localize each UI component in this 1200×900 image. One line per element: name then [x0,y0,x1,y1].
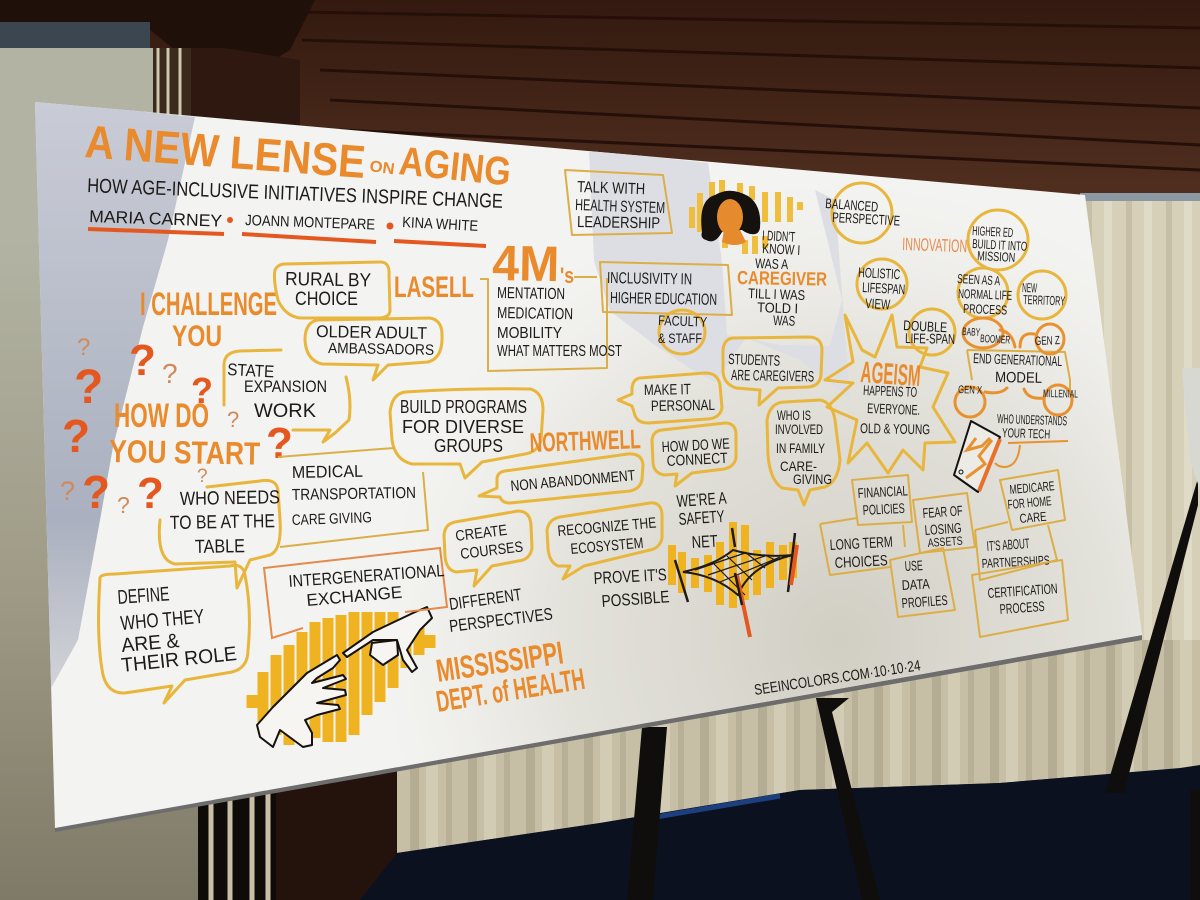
list: medical transportation care giving: MEDICAL [292,462,363,482]
bubble: who needs to be at the table: WHO NEEDS [180,487,280,510]
bubble: higher ed build it into mission: HIGHER ED [972,223,1014,240]
text: I didn't know I was a caregiver: WAS A [755,255,789,272]
box: it's about partnerships [975,522,1057,580]
list: medical transportation care giving [278,448,428,547]
text: I didn't know I was a caregiver [737,227,827,329]
title: on aging [368,139,513,195]
box: certification process: CERTIFICATION [987,580,1058,601]
bubble: double life-span [903,309,955,355]
bubble: build programs for diverse groups: GROUPS [434,436,503,456]
title: on aging: AGING [397,139,513,195]
box: certification process [972,560,1068,637]
box: financial policies [852,475,912,525]
box: financial policies: POLICIES [862,500,905,518]
bubble: higher ed build it into mission [968,210,1028,270]
bubble: students are caregivers [723,337,822,405]
box: it's about partnerships: PARTNERSHIPS [981,552,1050,571]
title block [83,115,513,246]
question marks: ? [162,358,178,389]
bubble: create courses: COURSES [459,538,524,563]
callout: ageism starburst: OLD & YOUNG [860,420,930,437]
bubble: non abandonment [479,454,643,503]
box: inclusivity in higher education [600,262,732,315]
text: we're a safety net: NET [691,532,718,552]
callout: ageism starburst: AGEISM [860,356,922,393]
section: I challenge you: I CHALLENGE [140,286,277,322]
section: how do you start [109,397,261,472]
diagram: end generational model: BOOMER [980,333,1010,347]
bubble: seen as a normal life process: PROCESS [963,301,1008,318]
text: who understands your tech: WHO UNDERSTANDS [997,411,1068,428]
right side board [1182,368,1200,490]
illustration: safety net [672,522,797,637]
bubble: who needs to be at the table: TO BE AT THE [170,511,275,534]
text: I didn't know I was a caregiver: WAS [773,312,795,329]
list: medical transportation care giving: CARE GIVING [292,509,372,529]
list: 4M's: MEDICATION [497,305,573,323]
bubble: rural by choice: CHOICE [295,289,358,310]
bubble: how do we connect: CONNECT [666,450,728,470]
bubble: seen as a normal life process: NORMAL LIFE [958,286,1013,303]
bubble: state expansion work: WORK [254,401,316,422]
bubble: define who they are and their role: THEIR ROLE [120,643,238,677]
section: how do you start: HOW DO [114,397,209,435]
easel legs [627,478,1200,900]
text: different perspectives: PERSPECTIVES [448,604,554,636]
box: long term choices [820,518,905,575]
bubble: higher ed build it into mission: MISSION [977,248,1016,265]
bubble: faculty & staff [658,310,708,354]
bubble: new territory [1018,271,1066,319]
bubble: who is involved in family care-giving: INVOLVED [775,421,823,437]
label: Northwell: NORTHWELL [529,424,641,458]
box: use data profiles: PROFILES [901,592,948,611]
question marks: ? [117,492,130,518]
box: financial policies: FINANCIAL [857,482,908,501]
question marks: ? [74,361,103,414]
bubble: older adult ambassadors [305,318,442,380]
text: I didn't know I was a caregiver: TOLD I [757,299,798,316]
box: talk with health system leadership: HEALTH SYSTEM [575,197,665,217]
bubble: who is involved in family care-giving [767,400,840,505]
presenters: MARIA CARNEY [89,207,222,231]
background: wood ceiling [0,0,1200,205]
diagram: end generational model: GEN X [958,384,983,397]
bubble: state expansion work: STATE [227,360,275,381]
diagram: end generational model: BABY [962,326,981,339]
question marks: ? [82,466,110,518]
bubble: make it personal [618,373,722,423]
bubble: faculty & staff: & STAFF [658,330,702,346]
label: innovation: INNOVATION [902,234,968,256]
bubble: older adult ambassadors: OLDER ADULT [316,322,427,343]
diagram: end generational model: END GENERATIONAL [973,350,1063,369]
bubble: who is involved in family care-giving: IN FAMILY [776,440,825,456]
bubble: rural by choice: RURAL BY [285,269,372,292]
bubble: make it personal: MAKE IT [644,381,691,399]
icon: phone [954,421,1000,492]
bubble: who needs to be at the table: TABLE [195,536,245,558]
box: inclusivity in higher education: HIGHER EDUCATION [610,290,717,309]
presenters [88,207,486,246]
box: use data profiles: USE [904,557,923,574]
title: A NEW LENSE [83,115,367,188]
bubble: older adult ambassadors: AMBASSADORS [328,340,434,359]
callout: ageism starburst: HAPPENS TO [863,382,917,400]
box: talk with health system leadership: LEADERSHIP [577,214,660,232]
bubble: balanced perspective: PERSPECTIVE [832,209,901,229]
bubble: state expansion work: EXPANSION [244,377,327,396]
question marks: ? [191,370,213,411]
list: 4M's: MENTATION [497,285,565,303]
bubble: double life-span: LIFE-SPAN [905,330,955,347]
box: intergenerational exchange: EXCHANGE [306,583,403,610]
bubble: double life-span: DOUBLE [903,317,948,335]
title: on aging: ON [368,158,396,178]
bubble: new territory: TERRITORY [1023,292,1066,308]
box: talk with health system leadership: TALK WITH [577,179,645,198]
section: I challenge you [140,286,277,353]
list: 4M's: MOBILITY [497,325,562,342]
background: carpet [360,765,1200,900]
text: different perspectives [448,585,554,636]
text: we're a safety net [676,489,728,552]
illustration: reaching hands [252,607,432,747]
bubble: new territory: NEW [1022,280,1038,296]
heading: 4M's: 4M [492,235,560,292]
box: use data profiles [890,548,955,617]
label: Mississippi Dept of Health: MISSISSIPPI [434,634,566,689]
bubble: who is involved in family care-giving: WHO IS [777,407,811,423]
bubble: holistic lifespan view: LIFESPAN [862,279,906,297]
background: window bar and right curtains [1080,193,1200,781]
list: 4M's: WHAT MATTERS MOST [497,343,622,360]
text: prove it's possible [593,565,670,611]
bubble: holistic lifespan view: VIEW [865,295,891,312]
callout: ageism starburst: EVERYONE. [867,400,920,418]
subtitle: HOW AGE-INCLUSIVE INITIATIVES INSPIRE CHANGE [87,175,503,213]
bubble: state expansion work [224,350,350,442]
bubble: create courses: CREATE [454,522,508,545]
question marks: ? [266,419,293,468]
text: prove it's possible: PROVE IT'S [593,565,667,588]
bubble: who is involved in family care-giving: GIVING [793,471,832,487]
box: medicare for home care: FOR HOME [1007,493,1052,512]
box: certification process: PROCESS [999,598,1045,617]
label: Mississippi Dept of Health: DEPT. of HEALTH [434,663,587,719]
bubble: faculty & staff: FACULTY [658,312,708,330]
text: who understands your tech [995,411,1068,467]
bubble: recognize the ecosystem: RECOGNIZE THE [557,514,657,540]
label: Lasell: LASELL [394,271,474,304]
text: we're a safety net: WE'RE A [676,489,728,511]
box: fear of losing assets: LOSING [924,519,962,538]
section: how do you start: YOU START [109,433,261,472]
box: use data profiles: DATA [901,576,931,593]
bubble: students are caregivers: STUDENTS [728,351,780,370]
box: fear of losing assets [913,493,975,553]
bubble: build programs for diverse groups: BUILD PROGRAMS [400,397,527,417]
text: we're a safety net: SAFETY [678,507,725,529]
bubble: non abandonment: NON ABANDONMENT [510,467,636,495]
question marks: ? [77,334,90,361]
question marks: ? [129,336,156,385]
bubble: seen as a normal life process [957,268,1013,318]
list: medical transportation care giving: TRANSPORTATION [292,485,416,504]
question marks [60,334,293,518]
box: long term choices: LONG TERM [829,534,893,554]
box: medicare for home care: CARE [1019,509,1047,526]
text: I didn't know I was a caregiver: TILL I WAS [748,285,805,303]
text: different perspectives: DIFFERENT [448,585,523,614]
callout: ageism starburst [825,315,955,473]
diagram: end generational model [955,318,1078,417]
text: I didn't know I was a caregiver: CAREGIVER [737,268,827,291]
label: Mississippi Dept of Health [434,634,587,719]
bubble: balanced perspective: BALANCED [825,195,879,215]
bubble: recognize the ecosystem [547,503,662,579]
background: lower curtains [397,640,1200,853]
bubble: create courses [444,511,532,586]
box: fear of losing assets: ASSETS [927,534,963,550]
bubble: who needs to be at the table [159,480,280,588]
bubble: define who they are and their role: ARE & [121,630,181,657]
bubble: define who they are and their role [99,565,249,703]
diagram: end generational model: MODEL [995,369,1042,387]
text: I didn't know I was a caregiver: I DIDN'T [762,227,796,245]
bubble: who is involved in family care-giving: CARE- [780,458,817,474]
section: I challenge you: YOU [172,320,222,353]
bubble: rural by choice [274,262,390,318]
presenters: KINA WHITE [402,214,479,235]
text: prove it's possible: POSSIBLE [601,587,670,611]
credit line: SEEINCOLORS.COM·10·10·24 [753,657,922,699]
bubble: holistic lifespan view: HOLISTIC [858,264,901,282]
background: left wall and slats [0,22,400,900]
question marks: ? [62,410,90,462]
diagram: end generational model: GEN Z [1035,333,1060,348]
text: who understands your tech: YOUR TECH [1002,425,1050,442]
box: inclusivity in higher education: INCLUSIVITY IN [607,270,692,288]
box: it's about partnerships: IT'S ABOUT [986,535,1030,554]
box: fear of losing assets: FEAR OF [922,502,963,521]
illustration: caregiver portrait [692,180,800,254]
question marks: ? [137,469,164,518]
paper sheet [30,100,1142,832]
box: medicare for home care: MEDICARE [1009,478,1055,497]
bubble: make it personal: PERSONAL [651,397,715,415]
question marks: ? [197,466,208,487]
bubble: recognize the ecosystem: ECOSYSTEM [570,535,644,558]
bubble: how do we connect: HOW DO WE [661,435,730,456]
box: talk with health system leadership [565,170,672,235]
box: intergenerational exchange: INTERGENERATIONAL [288,561,445,591]
presenters: JOANN MONTEPARE [245,212,375,234]
bubble: balanced perspective [825,183,901,243]
bubble: higher ed build it into mission: BUILD IT INTO [972,236,1028,254]
box: long term choices: CHOICES [834,552,888,572]
text: I didn't know I was a caregiver: KNOW I [762,240,801,258]
bubble: build programs for diverse groups [390,389,543,478]
bubble: how do we connect [652,423,736,486]
bubble: students are caregivers: ARE CAREGIVERS [731,367,814,385]
bubble: build programs for diverse groups: FOR DIVERSE [402,417,524,437]
bubble: holistic lifespan view [857,259,907,312]
box: medicare for home care [1000,470,1065,530]
question marks: ? [60,476,75,506]
bubble: seen as a normal life process: SEEN AS A [957,271,1001,288]
bubble: define who they are and their role: DEFINE [117,583,170,609]
bubble: define who they are and their role: WHO THEY [120,606,205,635]
heading: 4M's: 's [560,263,574,288]
diagram: end generational model: MILLENIAL [1043,388,1078,401]
question marks: ? [227,407,239,432]
box: intergenerational exchange [264,548,447,638]
list: 4M's [480,277,622,371]
